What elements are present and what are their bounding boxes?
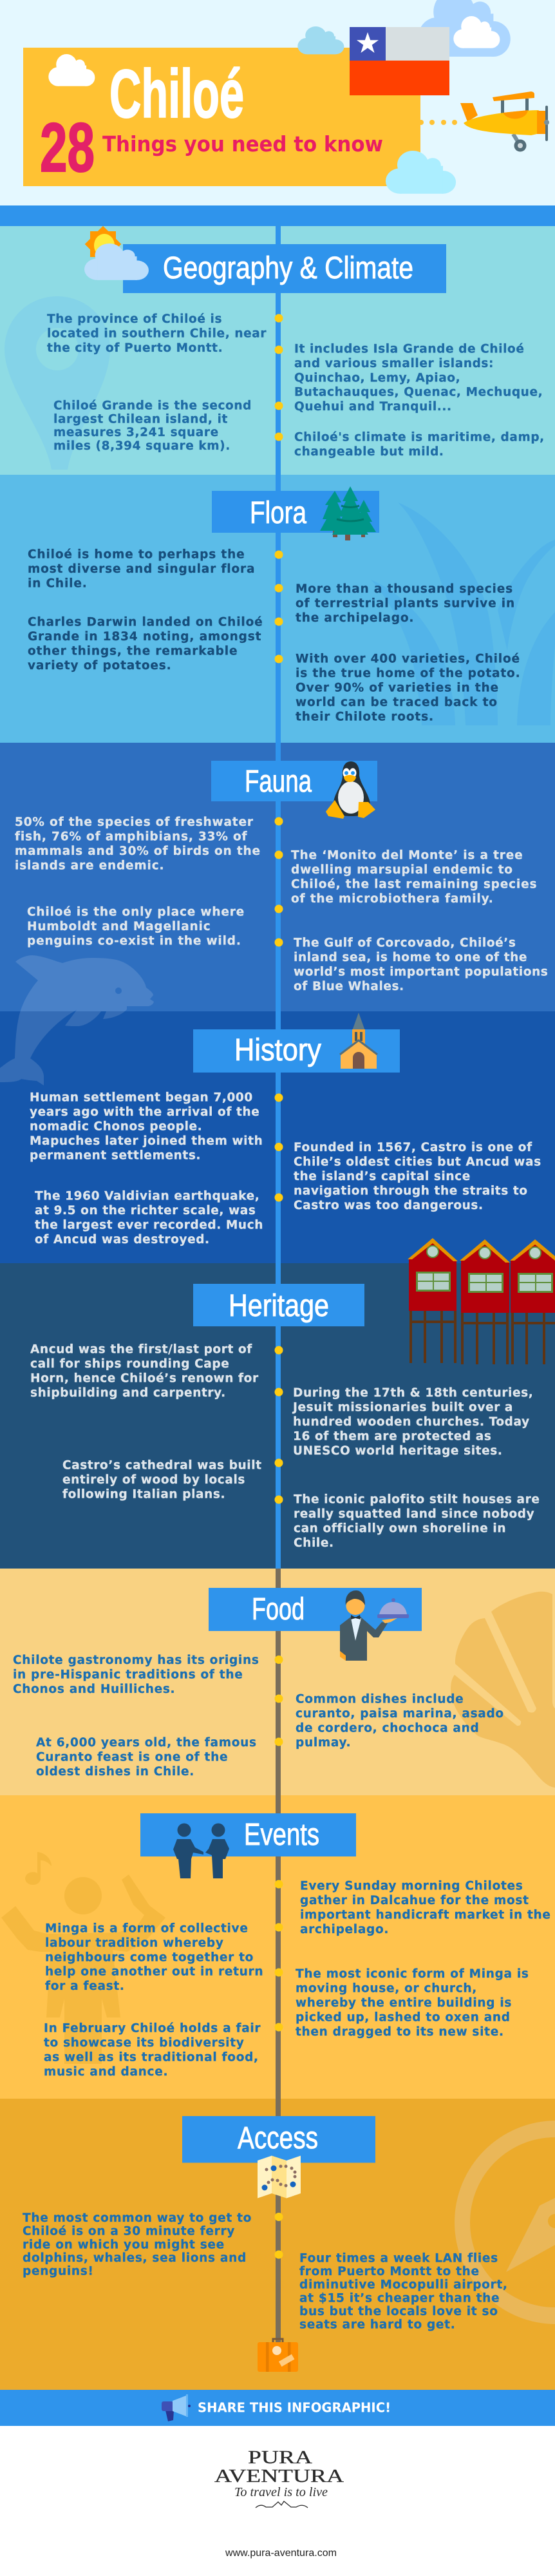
logo: Pura Aventura: PURA [248,2447,312,2468]
text: second largest island: Chiloé Grande is the second [53,399,252,412]
background icon: compass [455,2121,555,2324]
title panel [23,48,420,186]
text: second largest island: measures 3,241 square [53,426,219,439]
text: earthquake: The 1960 Valdivian earthquake, [35,1189,259,1203]
text: cathedral: entirely of wood by locals [62,1473,245,1487]
text: potato varieties: world can be traced back to [296,696,498,709]
icon: white cloud on title panel [48,54,95,86]
text: province: The province of Chiloé is [47,312,222,326]
text: common dishes: de cordero, chochoca and [296,1721,479,1735]
heading: Heritage: Heritage [229,1289,329,1323]
text: common dishes: Common dishes include [296,1693,464,1706]
icon: light cyan cloud [386,151,456,194]
text: endemic species: fish, 76% of amphibians, 33% of [15,830,248,844]
text: February fair: to showcase its biodiversity [44,2036,245,2050]
text: Curanto: At 6,000 years old, the famous [36,1736,257,1750]
logo: Pura Aventura: To travel is to live [234,2485,328,2499]
text: Darwin: other things, the remarkable [28,644,238,658]
text: Monito del Monte: The ‘Monito del Monte’ is a tree [291,849,523,862]
text: LAN flights: at $15 it’s cheaper than the [299,2291,500,2305]
text: potato varieties: Over 90% of varieties in the [296,682,499,694]
text: ferry: Chiloé is on a 30 minute ferry [23,2225,235,2238]
timeline [274,1011,283,1263]
panel: food [0,1569,555,1795]
text: Ancud: Horn, hence Chiloé’s renown for [30,1372,259,1385]
text: moving house: The most iconic form of Minga is [296,1967,529,1981]
heading: Access: Access [238,2121,318,2155]
text: Minga: neighbours come together to [45,1951,254,1964]
background icon: leaf tip [506,1760,531,1782]
text: diverse flora: most diverse and singular flora [28,562,255,576]
text: gastronomy origins: Chilote gastronomy has its origins [13,1654,259,1667]
text: blue whales: world’s most important populations [294,965,548,979]
text: endemic species: 50% of the species of freshwater [15,816,254,829]
panel: heritage [0,1238,555,1569]
text: smaller islands: It includes Isla Grande de Chiloé [294,343,524,356]
text: moving house: picked up, lashed to oxen and [296,2011,511,2024]
text: terrestrial plants: More than a thousand species [296,582,513,596]
icon: pine trees [320,486,376,540]
text: Jesuit churches: UNESCO world heritage sites. [293,1444,502,1458]
text: province: located in southern Chile, near [47,327,267,340]
text: human settlement: Mapuches later joined them with [30,1134,263,1148]
text: Monito del Monte: dwelling marsupial endemic to [291,863,513,877]
heading: Events [140,1813,356,1856]
icon: megaphone [162,2394,191,2421]
text: earthquake: the largest ever recorded. Much [35,1219,263,1232]
text: potato varieties: their Chilote roots. [296,710,434,724]
text: February fair: music and dance. [44,2065,168,2079]
icon: suitcase [258,2339,298,2372]
text: Ancud: call for ships rounding Cape [30,1357,229,1371]
heading: Geography & Climate [123,244,446,293]
heading: Flora [212,491,379,533]
background icon: dancing figure with music note [1,1852,165,2064]
timeline [274,1263,283,1569]
heading: History: History [234,1033,321,1067]
text: terrestrial plants: the archipelago. [296,611,414,625]
text: Ancud: Ancud was the first/last port of [30,1342,252,1357]
timeline [274,1569,283,1795]
text: blue whales: of Blue Whales. [294,980,404,993]
text: LAN flights: diminutive Mocopulli airport, [299,2278,508,2292]
text: second largest island: miles (8,394 square km). [53,439,230,453]
text: February fair: In February Chiloé holds a fair [44,2021,261,2036]
text: Dalcahue market: gather in Dalcahue for the most [300,1894,529,1907]
text: Minga: help one another out in return [45,1965,263,1979]
subtitle: Things you need to know [102,131,383,157]
heading: Events: Events [244,1818,319,1852]
heading: Food: Food [252,1592,305,1627]
text: smaller islands: Butachauques, Quenac, Mechuque, [294,386,543,399]
icon: two people shaking hands [173,1823,229,1878]
text: Darwin: variety of potatoes. [28,659,172,673]
text: Castro: Chile’s oldest cities but Ancud was [294,1156,541,1169]
icon: pale blue cloud [297,26,344,54]
icon: flag of Chile [350,27,449,95]
text: Curanto: Curanto feast is one of the [36,1751,228,1764]
text: Curanto: oldest dishes in Chile. [36,1765,194,1779]
text: ferry: ride on which you might see [23,2238,225,2251]
text: earthquake: at 9.5 on the richter scale, was [35,1204,256,1217]
text: Castro: Founded in 1567, Castro is one of [294,1141,532,1154]
text: second largest island: largest Chilean island, it [53,412,228,426]
icon: plane [460,91,549,152]
heading: Flora: Flora [250,496,306,530]
panel: header [0,0,555,205]
text: Minga: labour tradition whereby [45,1936,224,1950]
icon: penguin [326,761,375,819]
text: Monito del Monte: of the microbiothera family. [291,892,494,906]
text: human settlement: nomadic Chonos people. [30,1120,202,1134]
text: palafitos: The iconic palofito stilt houses are [294,1493,540,1506]
timeline [274,226,283,475]
text: penguins: penguins co-exist in the wild. [27,934,241,948]
text: common dishes: pulmay. [296,1736,351,1750]
text: Jesuit churches: During the 17th & 18th centuries, [293,1386,533,1400]
heading: Food [209,1588,422,1631]
background icon: dolphin [0,955,154,1085]
text: Dalcahue market: archipelago. [300,1923,389,1936]
icon: sun and cloud [84,226,149,280]
text: endemic species: islands are endemic. [15,859,164,872]
text: endemic species: mammals and 30% of birds on the [15,844,261,858]
text: blue whales: inland sea, is home to one of the [294,951,527,964]
background icon: map pin [5,296,110,470]
panel: access [0,2099,555,2390]
text: human settlement: years ago with the arrival of the [30,1105,259,1119]
text: penguins: Humboldt and Magellanic [27,920,211,933]
icon: palafito stilt houses [408,1238,555,1364]
text: moving house: moving house, or church, [296,1981,477,1996]
text: human settlement: Human settlement began 7,000 [30,1091,253,1104]
text: LAN flights: from Puerto Montt to the [299,2265,480,2278]
text: Jesuit churches: Jesuit missionaries built over a [292,1400,513,1415]
text: blue whales: The Gulf of Corcovado, Chiloé’s [294,937,516,949]
timeline [274,1795,283,2099]
plane trail dots [419,120,457,125]
timeline [274,475,283,743]
text: Minga: for a feast. [45,1980,125,1993]
text: Dalcahue market: Every Sunday morning Chilotes [300,1880,523,1893]
heading: History [193,1029,400,1073]
timeline [274,2099,283,2342]
website: www.pura-aventura.com [225,2548,337,2559]
text: LAN flights: Four times a week LAN flies [299,2252,498,2265]
text: Darwin: Charles Darwin landed on Chiloé [28,616,263,629]
text: Castro: navigation through the straits to [294,1184,528,1198]
text: gastronomy origins: Chonos and Huilliches. [13,1683,175,1696]
heading: Heritage [193,1284,364,1326]
text: moving house: then dragged to its new site. [296,2025,504,2039]
text: Jesuit churches: 16 of them are protected as [293,1430,491,1443]
text: potato varieties: With over 400 varieties, Chiloé [296,652,520,666]
icon: church [340,1013,377,1069]
icon: waiter with cloche [340,1590,409,1661]
panel: geography and climate [0,226,555,475]
panel: events [0,1795,555,2099]
logo: Pura Aventura: AVENTURA [214,2466,344,2486]
text: LAN flights: bus but the locals love it so [299,2305,498,2318]
text: smaller islands: and various smaller islands: [294,357,494,370]
text: smaller islands: Quinchao, Lemy, Apiao, [294,371,460,385]
text: gastronomy origins: in pre-Hispanic traditions of the [13,1668,243,1681]
icon: map [258,2155,301,2198]
text: penguins: Chiloé is the only place where [27,906,245,919]
panel: flora [0,475,555,743]
text: human settlement: permanent settlements. [30,1149,201,1162]
panel: share band [0,2390,555,2426]
text: common dishes: curanto, paisa marina, asado [296,1707,504,1721]
panel: footer [0,2426,555,2576]
text: potato varieties: is the true home of the potato. [296,667,520,680]
text: Dalcahue market: important handicraft market in the [300,1908,551,1922]
text: climate: Chiloé's climate is maritime, damp, [294,430,545,444]
text: palafitos: Chile. [294,1536,334,1550]
text: province: the city of Puerto Montt. [47,341,223,355]
text: cathedral: Castro’s cathedral was built [62,1458,262,1473]
text: ferry: penguins! [23,2265,94,2278]
text: moving house: whereby the entire building is [296,1996,512,2010]
background icon: leaf [451,1592,555,1788]
text: cathedral: following Italian plans. [62,1488,225,1501]
text: diverse flora: Chiloé is home to perhaps the [28,548,245,562]
blue band [0,205,555,226]
text: Monito del Monte: Chiloé, the last remaining species [291,877,537,892]
text: earthquake: of Ancud was destroyed. [35,1233,210,1246]
text: palafitos: really squatted land since nobody [294,1507,534,1521]
text: LAN flights: seats are hard to get. [299,2318,455,2332]
panel: fauna [0,743,555,1011]
text: Castro: the island’s capital since [294,1170,471,1183]
icon: big blue cloud [419,0,511,57]
text: palafitos: can officially own shoreline in [294,1522,506,1536]
logo: Pura Aventura [214,2447,344,2508]
icon: white cloud upper right [453,16,500,48]
heading: Fauna: Fauna [245,765,312,799]
text: ferry: The most common way to get to [23,2211,252,2225]
text: share call to action: SHARE THIS INFOGRAPHIC! [198,2400,391,2416]
text: February fair: as well as its traditional food, [44,2051,259,2064]
number 28: 28 [40,108,95,186]
background icon: grass [371,502,555,725]
heading: Access [182,2116,375,2163]
text: Ancud: shipbuilding and carpentry. [30,1386,226,1400]
text: ferry: dolphins, whales, sea lions and [23,2251,247,2265]
text: terrestrial plants: of terrestrial plants survive in [296,596,515,611]
text: diverse flora: in Chile. [28,577,88,590]
text: Darwin: Grande in 1834 noting, amongst [28,630,261,644]
text: smaller islands: Quehui and Tranquil... [294,400,452,414]
heading: Fauna [211,761,377,801]
heading: Geography & Climate: Geography & Climate [163,251,413,285]
panel: history [0,955,555,1263]
text: Jesuit churches: hundred wooden churches. Today [293,1415,530,1429]
text: Minga: Minga is a form of collective [45,1922,249,1935]
text: climate: changeable but mild. [294,445,444,459]
text: Castro: Castro was too dangerous. [294,1199,484,1212]
title: Chiloé [109,56,244,132]
timeline [274,743,283,1011]
